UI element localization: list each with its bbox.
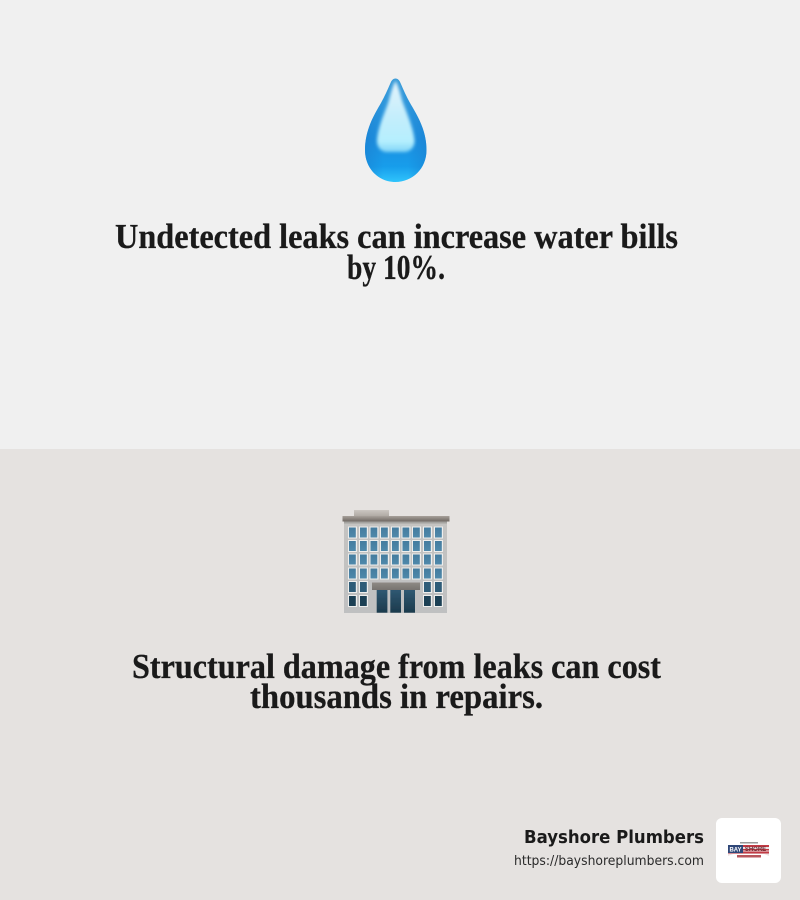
brand name: Bayshore Plumbers [524, 827, 704, 848]
heading: water bills: Undetected leaks can increase water bills [115, 217, 678, 256]
heading: water bills: by 10%. [347, 248, 445, 287]
logo card: SHORE [745, 847, 766, 853]
windows grid [348, 526, 443, 607]
icon: water drop [365, 78, 426, 182]
entrance canopy [372, 582, 420, 590]
entrance doors [377, 590, 415, 613]
icon: office building [342, 510, 450, 613]
heading: structural damage [132, 647, 661, 716]
heading: structural damage: thousands in repairs. [250, 677, 543, 716]
logo card [716, 818, 781, 883]
heading: structural damage: Structural damage from leaks can cost [132, 647, 661, 686]
panel: structural damage [0, 449, 800, 900]
heading: water bills [115, 217, 678, 287]
footer: brand [514, 818, 781, 883]
website url: https://bayshoreplumbers.com [514, 854, 704, 869]
logo card: BAY [729, 848, 742, 854]
panel: water bills [0, 0, 800, 449]
